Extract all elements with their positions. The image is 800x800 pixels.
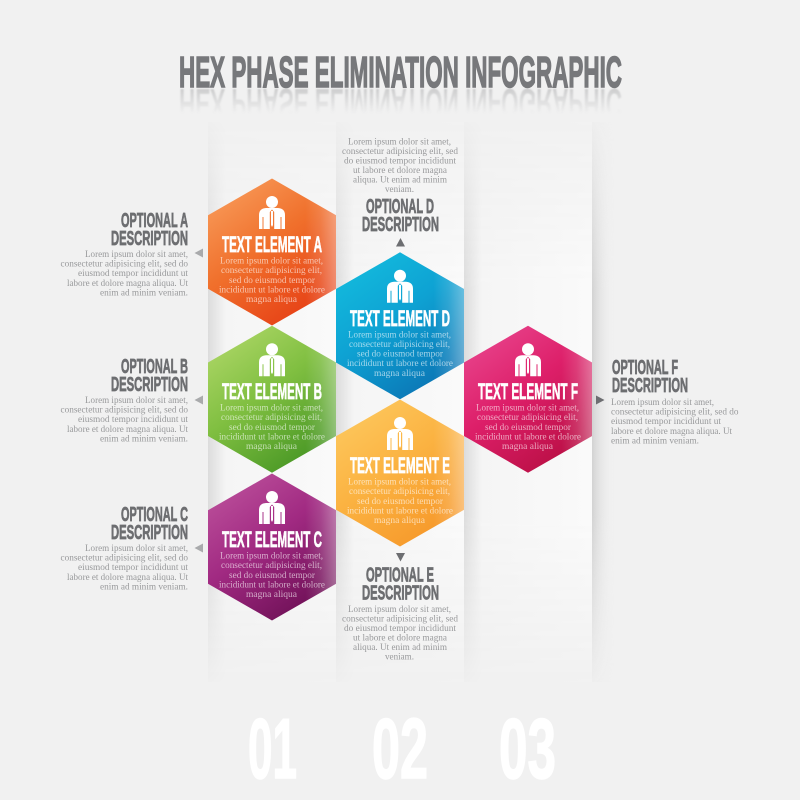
callout: optional B: DESCRIPTION: [111, 373, 188, 396]
text E: magna aliqua: [374, 515, 426, 526]
hexagon A: [208, 178, 336, 326]
callout: optional C: consectetur adipisicing elit, sed do: [60, 553, 188, 564]
callout: optional E: consectetur adipisicing elit, sed: [342, 614, 458, 624]
callout: optional E: aliqua. Ut enim ad minim: [353, 642, 448, 653]
callout: optional F: consectetur adipisicing elit, sed do: [611, 407, 739, 418]
icon: person E: [387, 417, 413, 450]
text B: Lorem ipsum dolor sit amet,: [220, 403, 323, 414]
callout: optional E: ut labore et dolore magna: [353, 632, 448, 643]
text A: Lorem ipsum dolor sit amet,: [220, 256, 323, 266]
callout: optional F: Lorem ipsum dolor sit amet,: [611, 397, 714, 408]
callout: optional D: consectetur adipisicing elit, sed: [342, 146, 458, 157]
text C: Lorem ipsum dolor sit amet,: [220, 550, 323, 562]
text B: magna aliqua: [246, 441, 298, 452]
callout: optional F: enim ad minim veniam.: [611, 435, 699, 446]
number 01: 01: [248, 702, 297, 797]
callout: optional F: labore et dolore magna aliqua. Ut: [611, 426, 732, 437]
text D: magna aliqua: [374, 368, 426, 379]
text F: Lorem ipsum dolor sit amet,: [476, 403, 579, 414]
callout: optional C: enim ad minim veniam.: [100, 581, 188, 592]
callout: optional D: DESCRIPTION: [362, 213, 439, 236]
text F: incididunt ut labore et dolore: [475, 432, 581, 443]
text A: sed do eiusmod tempor: [229, 275, 316, 286]
text E: incididunt ut labore et dolore: [347, 505, 453, 516]
text B: incididunt ut labore et dolore: [219, 432, 325, 443]
text C: magna aliqua: [246, 589, 298, 600]
arrow: B: [194, 396, 203, 404]
callout: optional C: labore et dolore magna aliqua. Ut: [67, 572, 188, 583]
text D: incididunt ut labore et dolore: [347, 358, 453, 369]
callout: optional D: [342, 136, 458, 236]
arrow: C: [194, 544, 203, 552]
callout: optional B: OPTIONAL B: [121, 355, 188, 378]
text F: consectetur adipisicing elit,: [477, 412, 578, 423]
text B: [219, 403, 325, 452]
callout: optional A: OPTIONAL A: [121, 209, 188, 232]
text F: sed do eiusmod tempor: [485, 422, 572, 433]
callout: optional D: ut labore et dolore magna: [353, 165, 448, 176]
text D: [347, 329, 453, 379]
callout: optional F: eiusmod tempor incididunt ut: [611, 416, 721, 427]
arrow: E: [396, 553, 405, 562]
callout: optional A: Lorem ipsum dolor sit amet,: [85, 249, 188, 260]
label C: TEXT ELEMENT C: [222, 527, 322, 552]
label A: TEXT ELEMENT A: [222, 232, 322, 257]
callout: optional A: [60, 209, 188, 298]
callout: optional F: DESCRIPTION: [612, 374, 688, 397]
text D: Lorem ipsum dolor sit amet,: [348, 329, 451, 340]
icon: person D: [387, 270, 413, 303]
text D: consectetur adipisicing elit,: [349, 339, 450, 350]
callout: optional E: do eiusmod tempor incididunt: [344, 623, 456, 634]
arrow: A: [194, 248, 203, 258]
phase numbers: [248, 702, 556, 797]
callout: optional F: [611, 356, 739, 446]
text B: sed do eiusmod tempor: [229, 422, 316, 433]
icon: person B: [259, 343, 285, 376]
callout: optional A: consectetur adipisicing elit, sed do: [60, 259, 188, 270]
text C: consectetur adipisicing elit,: [221, 560, 322, 571]
icon: person F: [515, 343, 541, 376]
text C: [219, 550, 325, 600]
callout: optional D: OPTIONAL D: [366, 195, 434, 218]
text A: magna aliqua: [246, 294, 298, 305]
callout: optional E: OPTIONAL E: [366, 564, 434, 586]
callout: optional D: veniam.: [385, 184, 414, 195]
arrow: D: [396, 238, 405, 246]
callout: optional C: DESCRIPTION: [111, 521, 188, 544]
callout: optional B: labore et dolore magna aliqua. Ut: [67, 424, 188, 435]
hexagon D: [336, 252, 464, 399]
text F: [475, 403, 581, 452]
callout: optional C: Lorem ipsum dolor sit amet,: [85, 543, 188, 554]
callout: optional E: veniam.: [385, 652, 414, 663]
text E: [347, 476, 453, 526]
callout: optional E: [342, 564, 458, 663]
callout: optional D: do eiusmod tempor incididunt: [344, 156, 456, 166]
callout: optional B: Lorem ipsum dolor sit amet,: [85, 395, 188, 406]
text F: magna aliqua: [502, 441, 554, 452]
callout: optional A: labore et dolore magna aliqua. Ut: [67, 278, 188, 289]
text E: sed do eiusmod tempor: [357, 496, 444, 507]
arrow: F: [596, 396, 604, 404]
callout: optional E: Lorem ipsum dolor sit amet,: [348, 604, 451, 615]
text C: incididunt ut labore et dolore: [219, 579, 325, 590]
callout: optional B: enim ad minim veniam.: [100, 433, 188, 444]
title: [179, 48, 622, 128]
callout: optional B: [60, 355, 188, 444]
text E: Lorem ipsum dolor sit amet,: [348, 476, 451, 488]
text C: sed do eiusmod tempor: [229, 570, 316, 581]
hexagon B: [208, 326, 336, 473]
callout: optional A: DESCRIPTION: [111, 227, 188, 250]
callout: optional D: aliqua. Ut enim ad minim: [353, 174, 448, 185]
icon: person C: [259, 491, 285, 524]
callout: optional C: eiusmod tempor incididunt ut: [78, 562, 188, 573]
text B: consectetur adipisicing elit,: [221, 412, 322, 423]
text E: consectetur adipisicing elit,: [349, 486, 450, 497]
hexagon F: [464, 326, 592, 473]
phase columns: [208, 155, 604, 648]
text A: consectetur adipisicing elit,: [221, 265, 322, 276]
callout: optional A: enim ad minim veniam.: [100, 287, 188, 298]
callout: optional F: OPTIONAL F: [612, 356, 678, 379]
hexagon C: [208, 474, 336, 620]
callout: optional C: [60, 503, 188, 592]
hexagon E: [336, 400, 464, 546]
text A: [219, 256, 325, 305]
callout: optional A: eiusmod tempor incididunt ut: [78, 268, 188, 279]
callout: optional D: Lorem ipsum dolor sit amet,: [348, 136, 451, 148]
text A: incididunt ut labore et dolore: [219, 284, 325, 295]
callout: optional E: DESCRIPTION: [362, 582, 439, 604]
label B: TEXT ELEMENT B: [222, 379, 322, 404]
label F: TEXT ELEMENT F: [478, 379, 578, 404]
callout: optional B: eiusmod tempor incididunt ut: [78, 414, 188, 425]
icon: person A: [259, 196, 285, 229]
text D: sed do eiusmod tempor: [357, 349, 444, 360]
label E: TEXT ELEMENT E: [350, 453, 450, 478]
label D: TEXT ELEMENT D: [350, 306, 450, 331]
callout: optional B: consectetur adipisicing elit, sed do: [60, 405, 188, 416]
callout: optional C: OPTIONAL C: [121, 503, 188, 526]
number 03: 03: [499, 702, 556, 797]
number 02: 02: [372, 702, 428, 797]
